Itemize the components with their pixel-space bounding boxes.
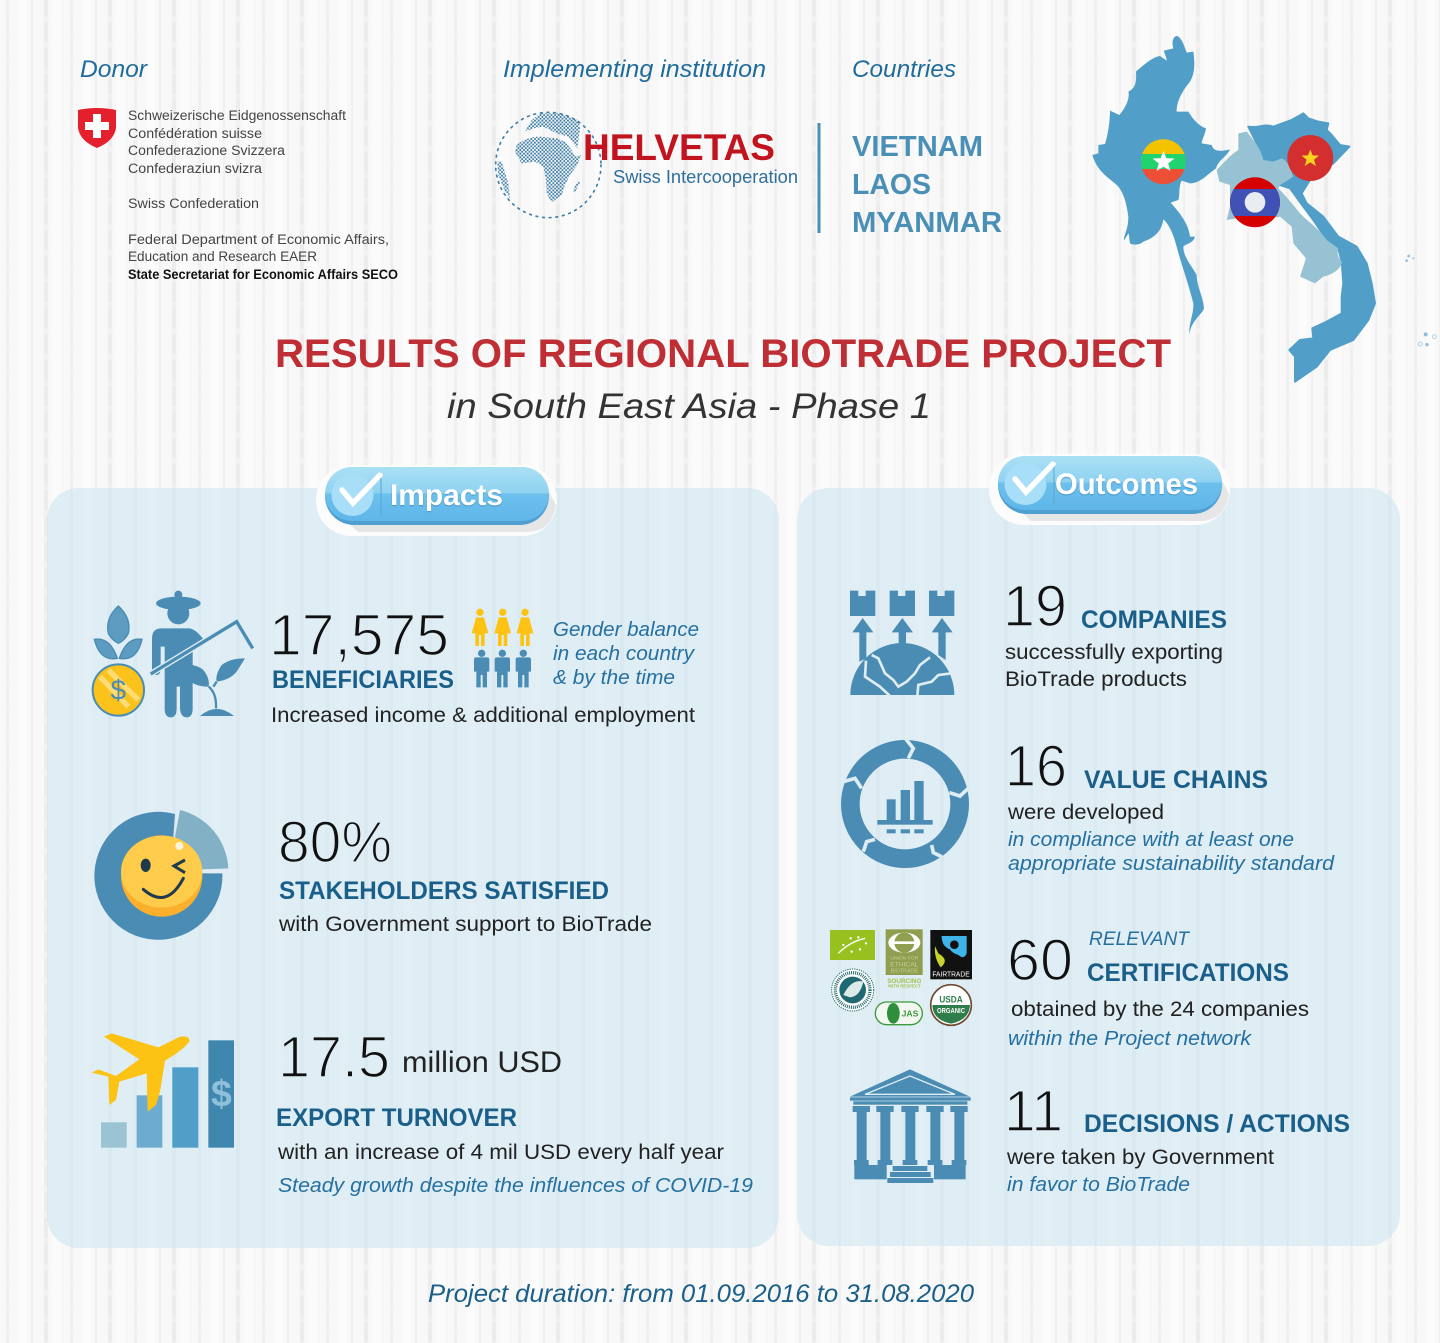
icon: usda organic: USDA [939,995,963,1005]
countries block [852,56,1002,239]
icon: farmer with coin and plants [93,591,253,717]
certification logos [830,929,972,1025]
icon: value chain cycle with bar chart [843,739,968,859]
stat: companies: BioTrade products [1005,668,1187,691]
panel: outcomes [797,454,1400,1246]
icon: gender balance people [472,609,533,687]
stat: certifications: obtained by the 24 companies [1011,998,1309,1021]
gender balance note: Gender balance [553,618,699,641]
stat: companies: 19 [1003,574,1067,639]
stat: beneficiaries: 17,575 [269,603,449,668]
icon: union for ethical biotrade: UNION FOR [890,955,919,961]
map: myanmar, laos, vietnam [1092,36,1436,382]
icon: jas organic: JAS [902,1009,919,1019]
stat: value chains [1005,734,1335,875]
stat: companies: COMPANIES [1081,606,1227,634]
stat: certifications: within the Project network [1008,1027,1253,1050]
stat: certifications: RELEVANT [1089,929,1190,950]
icon: union for ethical biotrade [886,929,923,989]
swiss confederation text: Confederaziun svizra [128,161,263,176]
swiss confederation text: Confédération suisse [128,126,262,141]
swiss confederation text: Confederazione Svizzera [128,143,286,158]
icon: jas organic [875,1002,922,1025]
gender balance note: in each country [553,642,696,665]
icon: usda organic [931,985,971,1025]
stat: export turnover [276,1025,753,1197]
stat: stakeholders satisfied: 80% [278,810,392,875]
swiss confederation text: State Secretariat for Economic Affairs SECO [128,267,398,282]
subtitle: in South East Asia - Phase 1 [447,387,931,426]
impacts button: Impacts [390,479,503,512]
swiss confederation text: Education and Research EAER [128,249,317,264]
country names: LAOS [852,169,931,201]
icon: laos flag [1230,177,1280,228]
icon: vietnam flag [1287,135,1333,181]
stat: beneficiaries: Increased income & additional employment [271,704,695,727]
stat: decisions and actions [1004,1079,1350,1196]
country names: VIETNAM [852,131,983,163]
icon: myanmar flag [1140,139,1187,185]
icon: rainforest alliance [832,969,874,1011]
panel: impacts [47,465,779,1248]
outcomes button: Outcomes [1055,468,1198,501]
icon: boxes exported from globe [850,591,954,696]
icon: union for ethical biotrade: SOURCING [887,978,921,985]
countries heading: Countries [852,56,956,83]
stat: beneficiaries [269,603,695,727]
stat: certifications: 60 [1007,928,1073,993]
icon: bar chart with plane: $ [211,1072,232,1114]
icon: fairtrade [930,930,972,979]
swiss confederation text: Swiss Confederation [128,196,259,211]
map: laos [1217,132,1342,283]
icon: swiss shield [78,108,116,148]
implementing institution heading: Implementing institution [503,56,766,83]
icon: fairtrade: FAIRTRADE [932,971,970,978]
stat: certifications [1007,928,1309,1050]
outcomes button [989,454,1230,525]
icon: usda organic: ORGANIC [937,1008,965,1015]
implementing institution block [496,56,798,218]
project duration footer: Project duration: from 01.09.2016 to 31.08.2020 [428,1280,974,1308]
stat: value chains: appropriate sustainability standard [1008,852,1335,875]
stat: stakeholders satisfied [278,810,652,936]
icon: bar chart with plane [92,1033,234,1148]
stat: companies: successfully exporting [1005,641,1223,664]
swiss confederation text: Federal Department of Economic Affairs, [128,232,389,247]
stat: export turnover: Steady growth despite the influences of COVID-19 [278,1174,753,1197]
stat: decisions and actions: 11 [1004,1079,1063,1144]
map: myanmar [1092,36,1230,334]
stat: decisions and actions: were taken by Government [1006,1146,1274,1169]
icon: government building [850,1069,971,1183]
stat: value chains: in compliance with at least one [1008,828,1294,851]
donor heading: Donor [80,56,148,83]
stat: certifications: CERTIFICATIONS [1087,959,1289,987]
stat: export turnover: 17.5 [278,1025,390,1090]
gender balance note [553,618,699,689]
stat: export turnover: EXPORT TURNOVER [276,1104,517,1132]
helvetas wordmark: HELVETAS [583,127,775,168]
icon: union for ethical biotrade: ETHICAL [890,961,919,968]
helvetas globe logo [496,112,601,218]
map: vietnam [1248,113,1375,382]
gender balance note: & by the time [553,666,675,689]
stat: stakeholders satisfied: STAKEHOLDERS SATISFIED [279,877,609,905]
swiss confederation text: Schweizerische Eidgenossenschaft [128,108,346,123]
stat: export turnover: million USD [402,1046,562,1079]
impacts button [316,465,557,536]
stat: decisions and actions: DECISIONS / ACTIONS [1084,1110,1350,1138]
stat: companies [1003,574,1227,691]
icon: union for ethical biotrade: BIOTRADE [891,969,918,975]
icon: donut chart with winking smiley [94,810,228,940]
decorative islands [1405,255,1436,346]
icon: union for ethical biotrade: WITH RESPECT [888,984,921,989]
swiss intercooperation text: Swiss Intercooperation [613,167,798,187]
stat: export turnover: with an increase of 4 mil USD every half year [277,1141,724,1164]
icon: eu organic leaf [830,930,875,960]
stat: decisions and actions: in favor to BioTrade [1007,1173,1190,1196]
stat: value chains: were developed [1007,801,1164,824]
donor block [78,56,398,282]
country names: MYANMAR [852,207,1002,239]
stat: stakeholders satisfied: with Government support to BioTrade [278,913,652,936]
icon: farmer with coin and plants: $ [111,674,127,705]
swiss confederation text [128,108,398,282]
stat: value chains: 16 [1005,734,1067,799]
stat: beneficiaries: BENEFICIARIES [272,666,454,694]
main title: RESULTS OF REGIONAL BIOTRADE PROJECT [275,332,1171,376]
country names [852,131,1002,239]
stat: value chains: VALUE CHAINS [1084,766,1268,794]
